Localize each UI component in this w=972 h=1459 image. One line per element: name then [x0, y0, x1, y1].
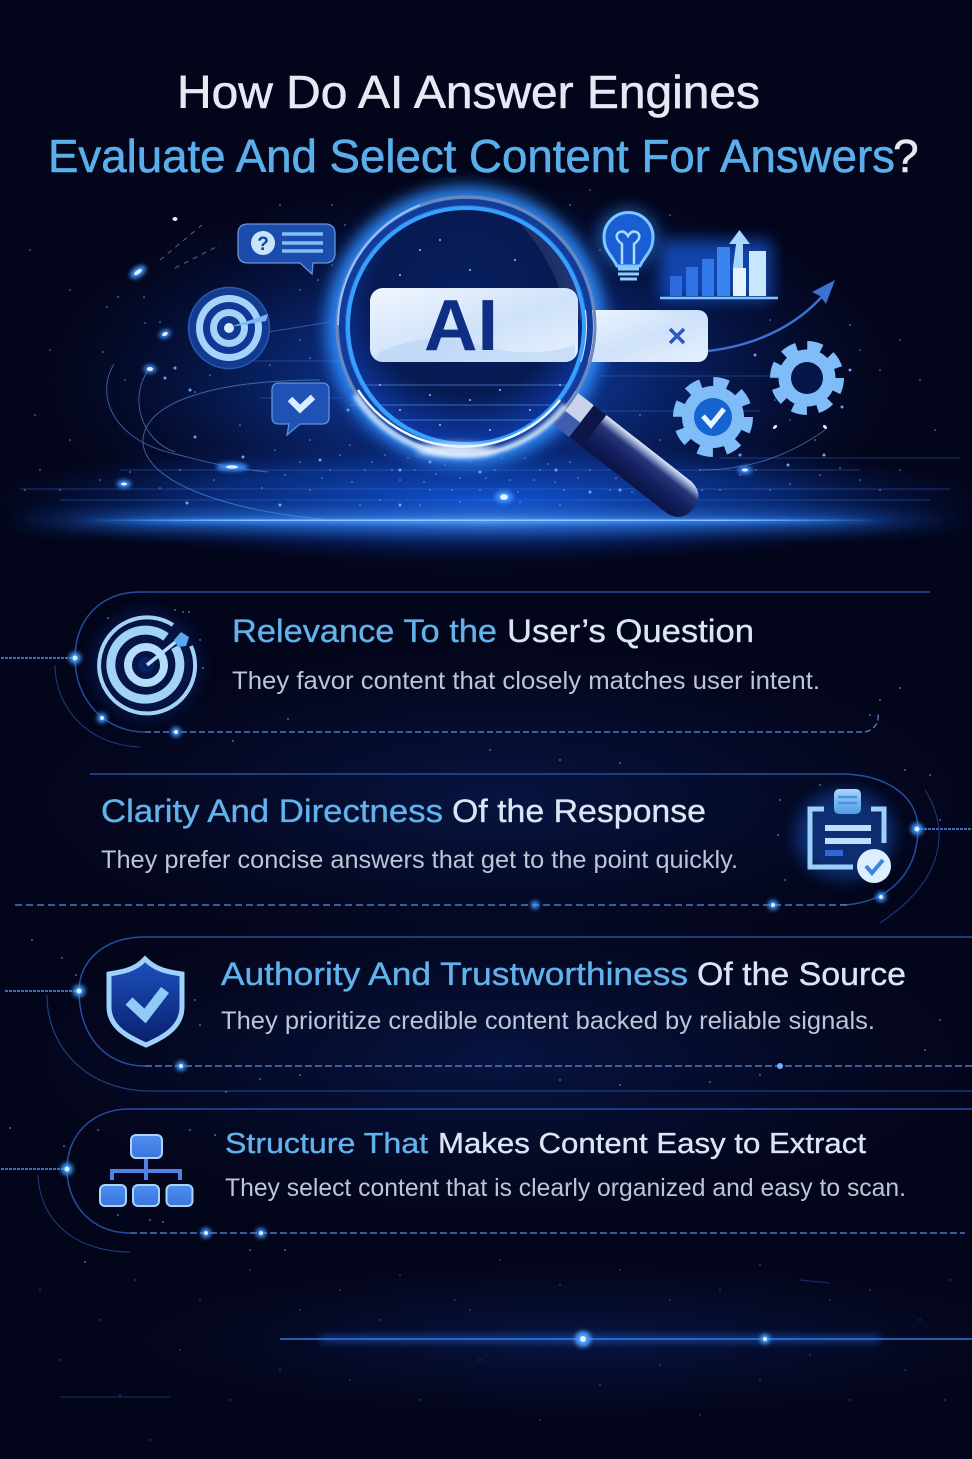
magnifier rings [337, 197, 595, 455]
heading: Of the Source [697, 956, 906, 992]
magnifier handle [549, 389, 706, 524]
icon: target [91, 610, 201, 720]
panel outline [15, 774, 972, 923]
heading: Relevance To the [232, 613, 497, 649]
heading: Of the Response [452, 793, 706, 829]
heading [101, 793, 706, 829]
panel outline [1, 592, 930, 747]
heading: Clarity And Directness [101, 793, 443, 829]
icon: gear with check [680, 384, 746, 450]
description: They favor content that closely matches user intent. [232, 667, 820, 695]
title [48, 66, 919, 182]
icon: light bulb [598, 208, 658, 279]
icon: target with dart [188, 288, 270, 368]
heading [221, 956, 906, 992]
panel: relevance [1, 592, 930, 747]
heading [225, 1128, 866, 1160]
hero starfield and light streaks [0, 190, 972, 528]
lens [347, 207, 585, 445]
icon: clipboard with check [795, 789, 895, 883]
panel: authority [5, 937, 972, 1091]
bar chart with up arrow [660, 230, 778, 300]
panel: structure [1, 1109, 972, 1252]
search bar right part [570, 310, 708, 362]
growth arrow [708, 280, 835, 351]
icon: gear [776, 347, 838, 409]
magnifier glow [338, 198, 594, 454]
icon: chat bubble with question mark: ? [257, 234, 269, 255]
heading: Structure That [225, 1128, 428, 1160]
panel outline [1, 1109, 972, 1252]
bottom light line [60, 1280, 972, 1397]
title: ? [893, 130, 919, 182]
icon: magnifying glass [337, 197, 708, 524]
AI search bar: AI [424, 286, 498, 366]
icon: chat bubble with question mark [238, 224, 335, 274]
description: They select content that is clearly organized and easy to scan. [225, 1174, 906, 1202]
description: They prioritize credible content backed by reliable signals. [221, 1007, 875, 1035]
icon: check speech bubble [272, 383, 329, 435]
icon: shield [109, 959, 182, 1045]
panel outline [5, 937, 972, 1091]
panel: clarity [15, 774, 972, 923]
card sparkles [10, 610, 950, 1440]
AI search bar [370, 286, 578, 366]
heading: User’s Question [507, 613, 754, 649]
icon: hierarchy [100, 1135, 192, 1206]
heading [232, 613, 754, 649]
heading: Makes Content Easy to Extract [438, 1128, 866, 1160]
title: How Do AI Answer Engines [177, 66, 760, 118]
title: Evaluate And Select Content For Answers [48, 130, 895, 182]
description: They prefer concise answers that get to the point quickly. [101, 846, 738, 874]
heading: Authority And Trustworthiness [221, 956, 688, 992]
